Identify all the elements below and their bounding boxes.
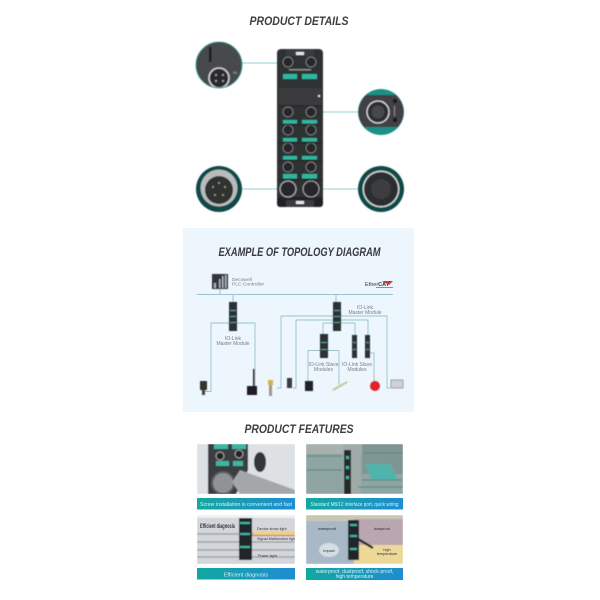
PLC controller: [212, 274, 228, 289]
detail circle: female connector: [358, 166, 404, 212]
module labels: IO-Link Slave: [308, 362, 339, 368]
photo: environments: [306, 515, 403, 564]
module labels: Modules: [348, 367, 367, 373]
module body: [277, 49, 323, 207]
module labels: IO-Link Slave: [342, 362, 372, 368]
label: PLC: PLC Controller: [232, 282, 264, 288]
module labels: [216, 305, 382, 373]
IO-Link master modules: [229, 302, 341, 331]
label: PLC: Decowell: [232, 277, 252, 283]
photo: diagnosis: [197, 515, 297, 564]
module labels: Master Module: [216, 341, 250, 347]
title: product details: PRODUCT DETAILS: [250, 16, 349, 28]
detail circle: male connector: [196, 166, 242, 212]
feature: efficient diagnosis: Efficient diagnosis: [224, 572, 268, 578]
caption: [197, 568, 295, 580]
infographic canvas: [183, 16, 414, 580]
panel: topology diagram: [183, 228, 414, 412]
photo: environments: high: [383, 548, 391, 552]
title: product features: PRODUCT FEATURES: [244, 424, 354, 436]
photo: diagnosis: Device show light: [257, 527, 287, 531]
photo: environments: dustproof: [374, 527, 391, 531]
detail circle: IN port: IN: [233, 70, 237, 75]
feature: standard interface: Standard M8/12 interface port, quick wiring: [310, 502, 399, 508]
heading: topology: EXAMPLE OF TOPOLOGY DIAGRAM: [218, 247, 381, 259]
caption: [306, 498, 403, 510]
feature: screw installation: Screw installation is convenient and fast: [200, 502, 293, 508]
caption: [306, 568, 403, 580]
EtherCAT logo: EtherCAT: [365, 282, 390, 288]
connector lines: [241, 63, 360, 189]
detail circle: port on module: [358, 89, 404, 135]
photo: environments: Impact: [323, 549, 336, 553]
feature: environmental protection: waterproof, dustproof, shock-proof,: [316, 569, 393, 575]
module labels: IO-Link: [357, 305, 374, 311]
photo: diagnosis: Signal Malfunction light: [257, 537, 297, 541]
feature: standard interface: [306, 444, 403, 510]
photo: environments: temperature: [377, 552, 397, 556]
feature: environmental protection: high temperature: [336, 574, 374, 580]
feature: screw installation: [197, 444, 295, 510]
panel: product details: [196, 42, 404, 212]
module labels: Master Module: [348, 310, 382, 316]
IO-Link slave modules: [320, 334, 370, 358]
photo: diagnosis: Efficient diagnosis: [200, 524, 235, 530]
detail circle: IN port: [196, 42, 242, 88]
network lines: [197, 289, 393, 392]
caption: [197, 498, 295, 510]
feature: efficient diagnosis: [197, 515, 297, 580]
feature: environmental protection: [306, 515, 403, 580]
module labels: Modules: [314, 367, 333, 373]
photo: diagnosis: Power light: [258, 554, 278, 558]
field devices: [200, 369, 403, 396]
photo: factory: [306, 444, 403, 494]
module labels: IO-Link: [225, 336, 242, 342]
photo: environments: waterproof: [318, 527, 337, 531]
photo: screw installation: [197, 444, 295, 494]
